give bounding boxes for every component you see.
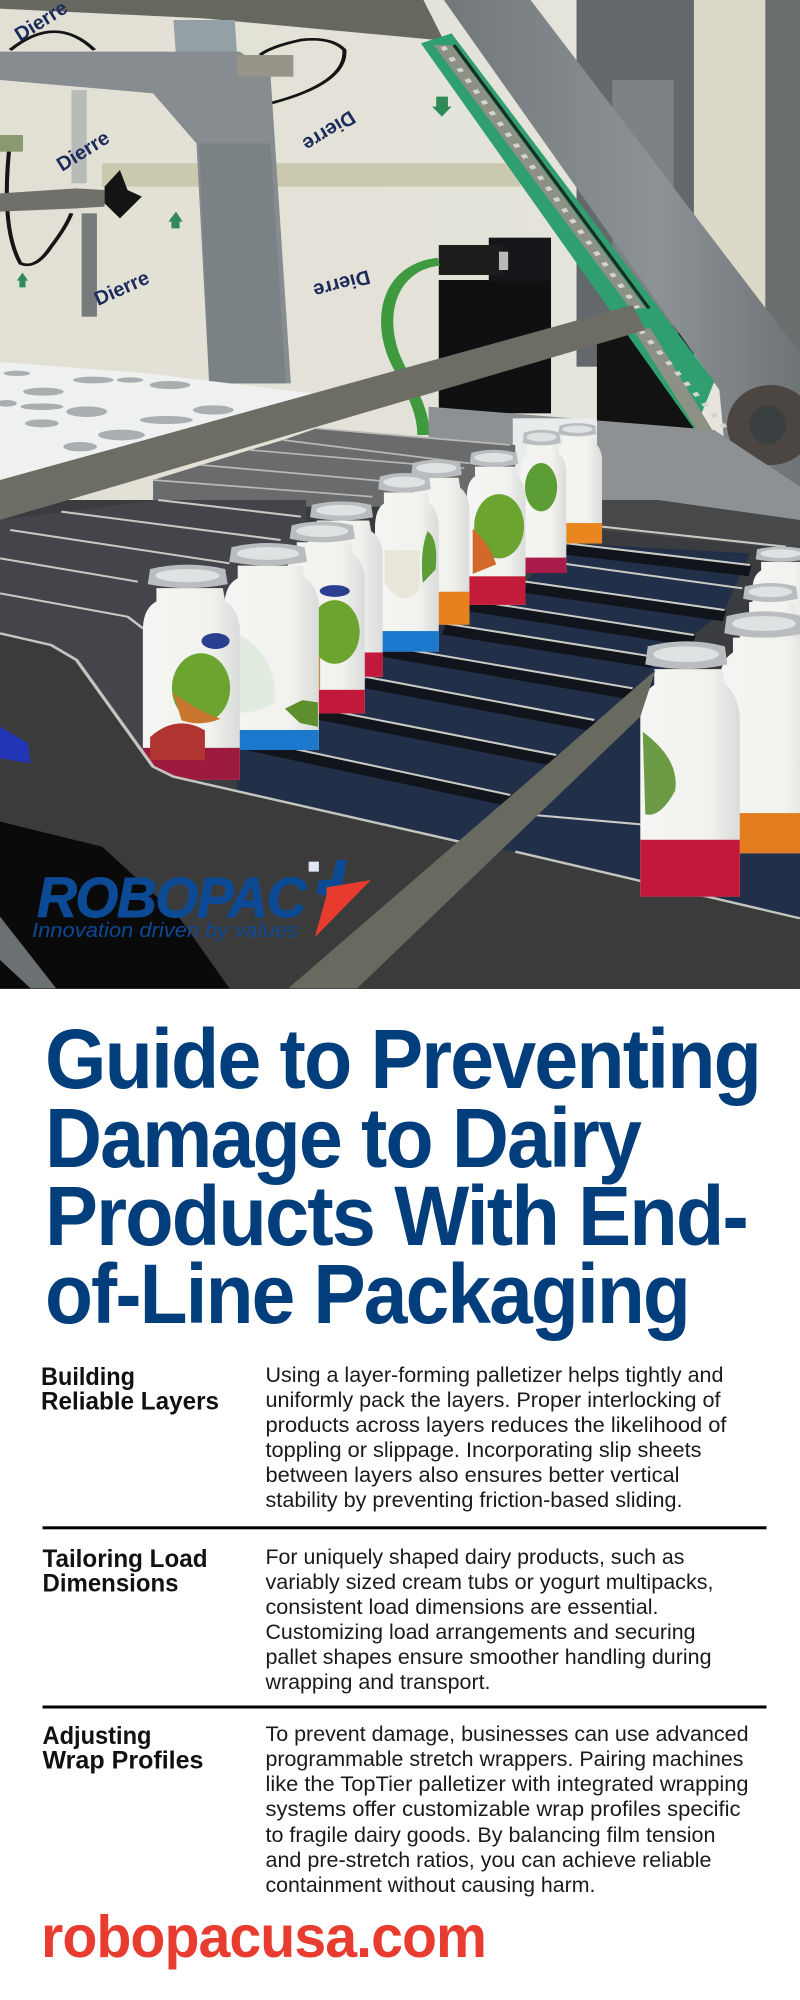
right bottle back [740,583,800,757]
right bottle front [640,641,740,897]
background bottle tops [0,362,597,502]
body text: To prevent damage, businesses can use advanced [266,1723,748,1746]
conveyor arm [444,0,800,500]
factory wall [0,0,800,500]
dark right machine block [602,500,800,550]
body text: wrapping and transport. [264,1671,490,1694]
body text: to fragile dairy goods. By balancing film tension [266,1824,716,1847]
bottle 5 [375,473,439,652]
wall brand marks: Dierre [311,265,372,301]
logo mark [309,860,371,937]
green arrows on wall [17,97,452,287]
heading [42,1545,208,1598]
section: adjusting wrap profiles [42,1722,748,1897]
body text: toppling or slippage. Incorporating slip sheets [266,1439,702,1462]
body text: Using a layer-forming palletizer helps tightly and [266,1364,724,1387]
logo tagline: Innovation driven by values [32,920,298,942]
wall brand marks: Dierre [53,127,114,176]
heading [42,1722,204,1774]
heading: Building [41,1363,135,1391]
body text: consistent load dimensions are essential. [266,1596,658,1619]
black cable loops [7,32,344,265]
website url: robopacusa.com [41,1904,486,1970]
far right bottle [753,546,800,687]
title: Damage to Dairy [45,1091,642,1185]
wall brand marks: Dierre [298,106,359,155]
body text: For uniquely shaped dairy products, such as [266,1546,684,1569]
section: building reliable layers [41,1363,727,1512]
middle left slats [0,500,306,767]
sensor clamp and knob [0,90,142,317]
right bottle middle [719,611,800,853]
body text: variably sized cream tubs or yogurt multipacks, [266,1571,714,1594]
heading: Tailoring Load [42,1545,208,1573]
right bottle row [640,546,800,897]
heading: Adjusting [42,1722,152,1750]
body text: containment without causing harm. [266,1874,596,1897]
title: Guide to Preventing [45,1012,760,1106]
green conveyor guide [421,33,770,480]
dark silhouette lower left [0,822,230,988]
bottle 6 [408,460,469,625]
steel gantry frame [0,20,293,383]
bottle 9 [556,423,602,543]
bottle 8 [520,430,566,573]
title [45,1012,760,1341]
grey strip lower left [0,917,56,988]
side table [429,407,800,543]
logo wordmark: ROBOPAC [37,866,307,930]
navy slats [237,527,800,920]
heading: Dimensions [42,1570,178,1598]
body text: products across layers reduces the likelihood of [266,1414,727,1437]
blue tag [0,727,31,763]
diagonal beam over bottles [0,305,645,520]
bottle 3 [286,521,365,713]
front panel with steel edge [0,633,800,988]
green cable [387,262,439,435]
heading [41,1363,219,1416]
body text: uniformly pack the layers. Proper interlocking of [266,1389,721,1412]
hero photo: dairy bottles on packaging line [0,0,800,989]
bottle 4 [306,501,383,677]
heading: Reliable Layers [41,1388,219,1416]
body text: and pre-stretch ratios, you can achieve reliable [266,1849,712,1872]
body text [266,1364,727,1512]
bottle 2 [224,543,319,750]
body text: stability by preventing friction-based sliding. [266,1489,682,1512]
body text: programmable stretch wrappers. Pairing machines [266,1748,744,1771]
body text: pallet shapes ensure smoother handling during [266,1646,712,1669]
body text: between layers also ensures better vertical [266,1464,680,1487]
foreground diagonal bar [288,670,656,988]
body text [264,1546,714,1694]
body text: like the TopTier palletizer with integrated wrapping [266,1773,748,1796]
bottle 7 [467,450,526,605]
wall brand marks [11,0,372,311]
body text: systems offer customizable wrap profiles specific [266,1798,740,1821]
section: tailoring load dimensions [42,1545,714,1694]
bottle 1 [143,565,240,780]
title: of-Line Packaging [45,1247,689,1341]
back bottle row [143,423,602,780]
body text [266,1723,748,1897]
heading: Wrap Profiles [42,1746,204,1774]
body text: Customizing load arrangements and securing [266,1621,696,1644]
back grey slats [153,428,515,507]
servo motor [439,238,551,413]
top steel beam [0,0,444,41]
title: Products With End- [45,1169,747,1263]
wall brand marks: Dierre [91,267,153,311]
sprocket [727,385,800,465]
